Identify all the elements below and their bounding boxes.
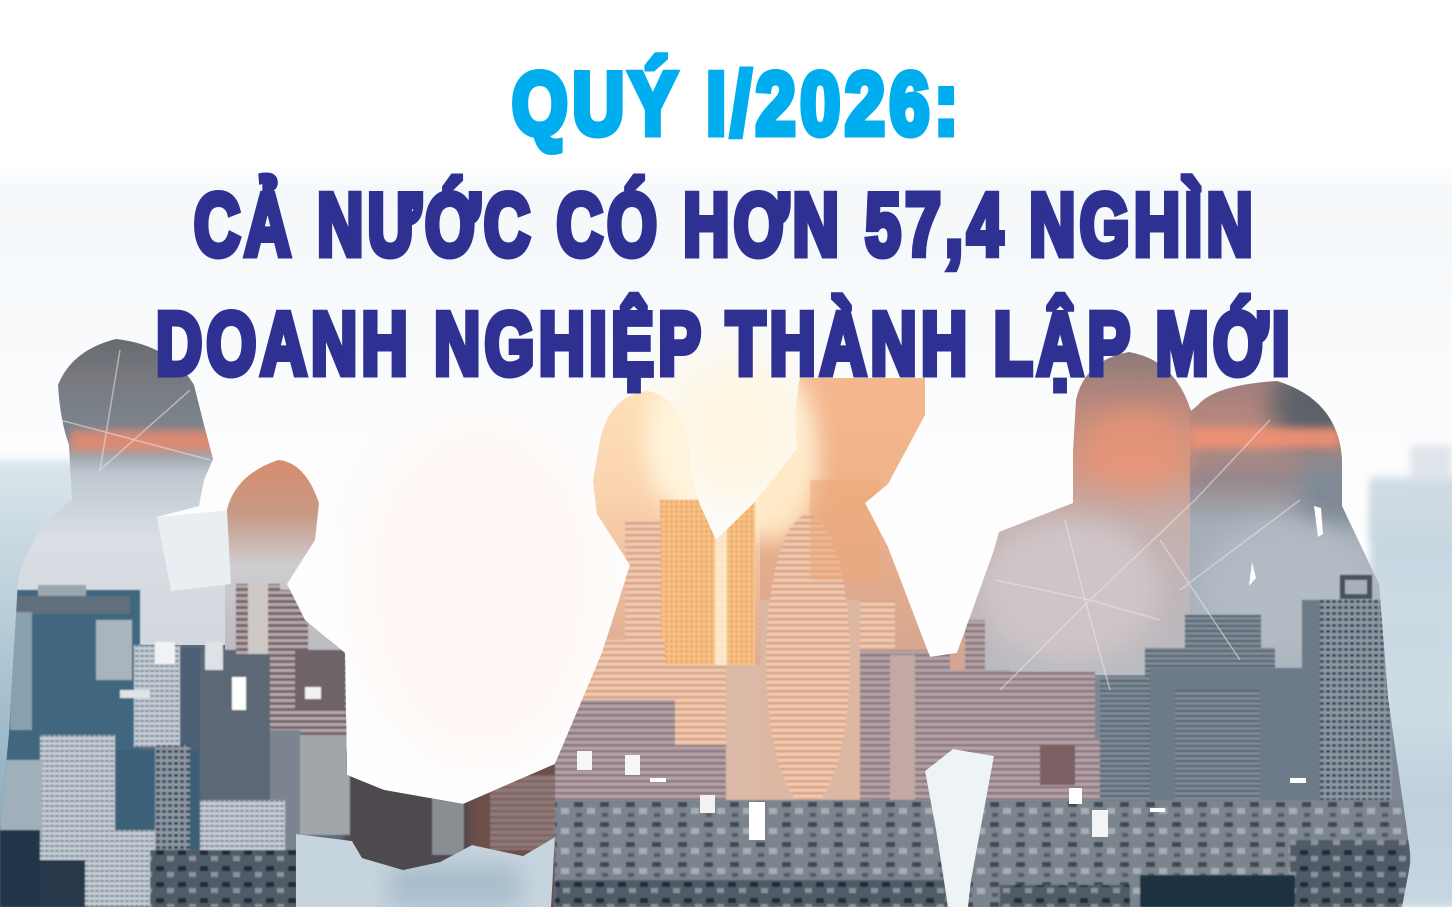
figure: left man bbox=[0, 335, 232, 645]
figure: right man bbox=[965, 345, 1197, 675]
lens flares bbox=[70, 430, 220, 452]
glass roof lines bbox=[60, 350, 1300, 690]
shoulders tint bbox=[980, 520, 1160, 660]
figure: woman left bbox=[225, 460, 344, 652]
silhouettes of business people with city overlay bbox=[0, 335, 1410, 907]
figure: centre woman bbox=[555, 385, 765, 745]
title bbox=[156, 54, 1294, 393]
handshake arm bbox=[342, 760, 557, 872]
shirt highlights bbox=[1314, 506, 1323, 537]
centre city bbox=[555, 480, 1140, 907]
figure: right woman bbox=[1190, 381, 1384, 668]
left city bbox=[0, 584, 350, 907]
right city bbox=[1100, 575, 1392, 810]
silhouette base fill bbox=[0, 640, 1410, 907]
figure: centre man bbox=[760, 378, 970, 670]
title line 1: QUÝ I/2026: bbox=[512, 54, 963, 153]
lower city mosaic bbox=[555, 800, 1410, 907]
handshake city texture bbox=[432, 775, 560, 855]
right-hand hazy skyline detail bbox=[1370, 445, 1452, 540]
